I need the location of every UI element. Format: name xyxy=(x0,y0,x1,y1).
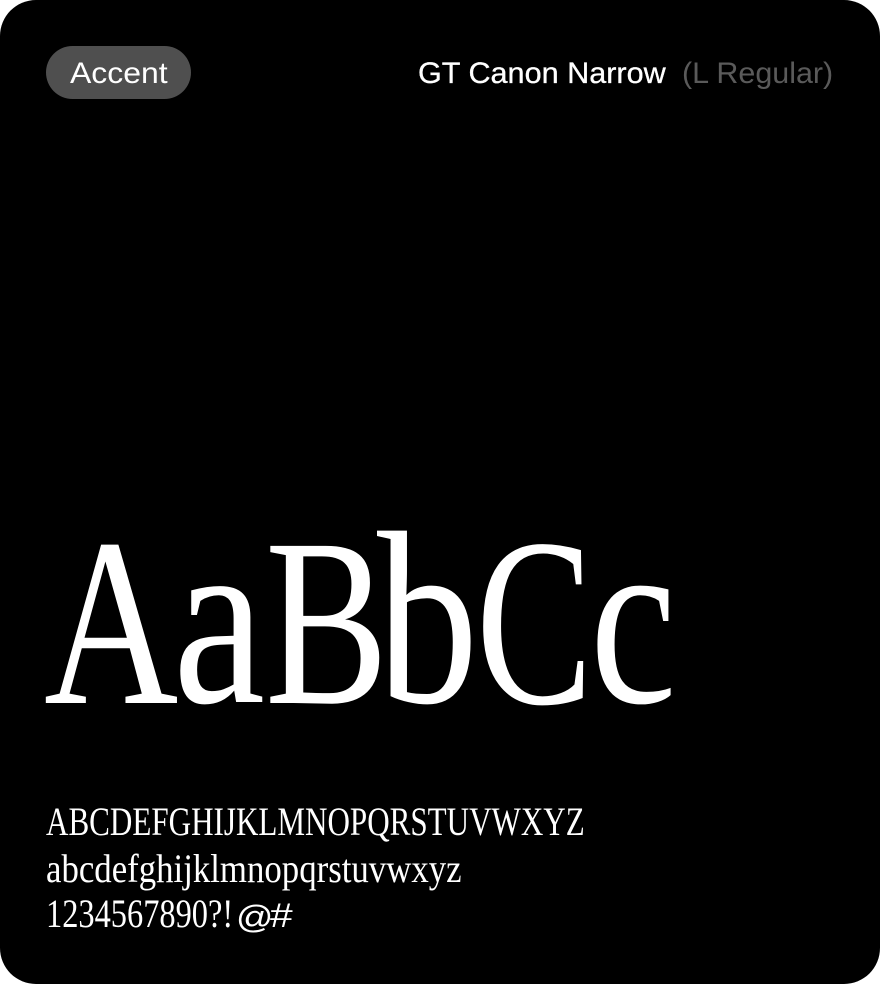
specimen: large glyphs: C xyxy=(476,489,593,755)
tag label: Accent: Accent xyxy=(70,57,167,90)
specimen: large glyphs xyxy=(44,483,677,756)
specimen: numerals and symbols: 1234567890?! xyxy=(46,891,233,936)
label: font style: (L Regular) xyxy=(682,57,833,90)
specimen: numerals and symbols: @ xyxy=(236,899,273,935)
tag: Accent pill xyxy=(46,46,191,99)
specimen: uppercase alphabet: ABCDEFGHIJKLMNOPQRSTUVWXYZ xyxy=(46,799,585,844)
specimen: large glyphs: B xyxy=(265,489,388,755)
specimen: large glyphs: A xyxy=(44,489,178,755)
specimen: large glyphs: a xyxy=(173,483,265,756)
specimen: numerals and symbols: # xyxy=(270,897,293,935)
specimen: large glyphs: c xyxy=(590,483,677,756)
specimen: lowercase alphabet: abcdefghijklmnopqrstuvwxyz xyxy=(46,846,462,891)
heading: font name: GT Canon Narrow xyxy=(418,57,666,90)
specimen: large glyphs: b xyxy=(377,483,478,756)
